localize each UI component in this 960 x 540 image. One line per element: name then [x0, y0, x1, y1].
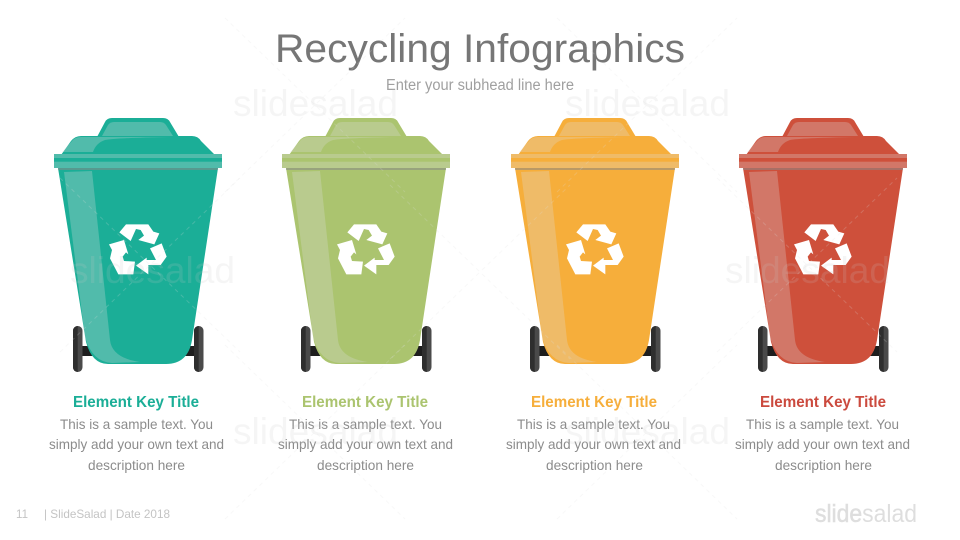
- lid rim: [739, 154, 907, 170]
- text block: green: description here: [317, 457, 414, 473]
- body highlight: [64, 171, 140, 363]
- subhead: Enter your subhead line here: [386, 77, 574, 94]
- text block: red: [735, 394, 910, 473]
- wheels and axle: [301, 326, 432, 372]
- wheels and axle: [758, 326, 888, 372]
- watermarks: slidesalad: [70, 250, 235, 291]
- wheels and axle: [73, 326, 204, 372]
- icon: recycle symbol: [566, 224, 624, 274]
- footer text: 11: [16, 507, 28, 521]
- lid rim: [511, 154, 679, 170]
- text block: orange: description here: [546, 457, 643, 473]
- text block: green: Element Key Title: [302, 394, 428, 411]
- text block: red: This is a sample text. You: [746, 416, 899, 432]
- footer text: | SlideSalad | Date 2018: [44, 507, 170, 521]
- text block: teal: simply add your own text and: [49, 436, 224, 452]
- icon: recycle symbol: [337, 224, 395, 274]
- text block: green: This is a sample text. You: [289, 416, 442, 432]
- lid: [518, 136, 672, 155]
- lid: [289, 136, 443, 155]
- lid rim: [54, 154, 222, 170]
- footer logo: slidesalad: [815, 500, 917, 528]
- text block: red: simply add your own text and: [735, 436, 910, 452]
- text block: teal: [49, 394, 224, 473]
- body highlight: [749, 171, 825, 363]
- bin body: [515, 168, 675, 364]
- watermarks: slidesalad: [565, 411, 730, 452]
- watermarks: slidesalad: [565, 83, 730, 124]
- lid handle: [782, 118, 864, 137]
- bin body: [743, 168, 903, 364]
- lid handle: [554, 118, 636, 137]
- wheels and axle: [530, 326, 660, 372]
- watermarks: slidesalad: [725, 250, 890, 291]
- title: Recycling Infographics: [275, 27, 685, 71]
- body highlight: [521, 171, 597, 363]
- text block: teal: description here: [88, 457, 185, 473]
- lid: [61, 136, 215, 155]
- text block: orange: This is a sample text. You: [517, 416, 670, 432]
- text block: teal: Element Key Title: [73, 394, 199, 411]
- icon: recycle symbol: [794, 224, 852, 274]
- text block: orange: simply add your own text and: [506, 436, 681, 452]
- bin: teal: [54, 118, 222, 372]
- body highlight: [292, 171, 368, 363]
- lid rim: [282, 154, 450, 170]
- text block: teal: This is a sample text. You: [60, 416, 213, 432]
- lid: [746, 136, 900, 155]
- text block: green: [278, 394, 453, 473]
- watermarks: slidesalad: [233, 411, 398, 452]
- text block: red: Element Key Title: [760, 394, 886, 411]
- icon: recycle symbol: [109, 224, 167, 274]
- text block: red: description here: [775, 457, 872, 473]
- lid handle: [325, 118, 407, 137]
- watermarks: slidesalad: [233, 83, 398, 124]
- text block: orange: [506, 394, 681, 473]
- text block: orange: Element Key Title: [531, 394, 657, 411]
- text block: green: simply add your own text and: [278, 436, 453, 452]
- bin: red: [739, 118, 907, 372]
- bin: green: [282, 118, 450, 372]
- lid handle: [97, 118, 179, 137]
- bin: orange: [511, 118, 679, 372]
- bin body: [58, 168, 218, 364]
- bin body: [286, 168, 446, 364]
